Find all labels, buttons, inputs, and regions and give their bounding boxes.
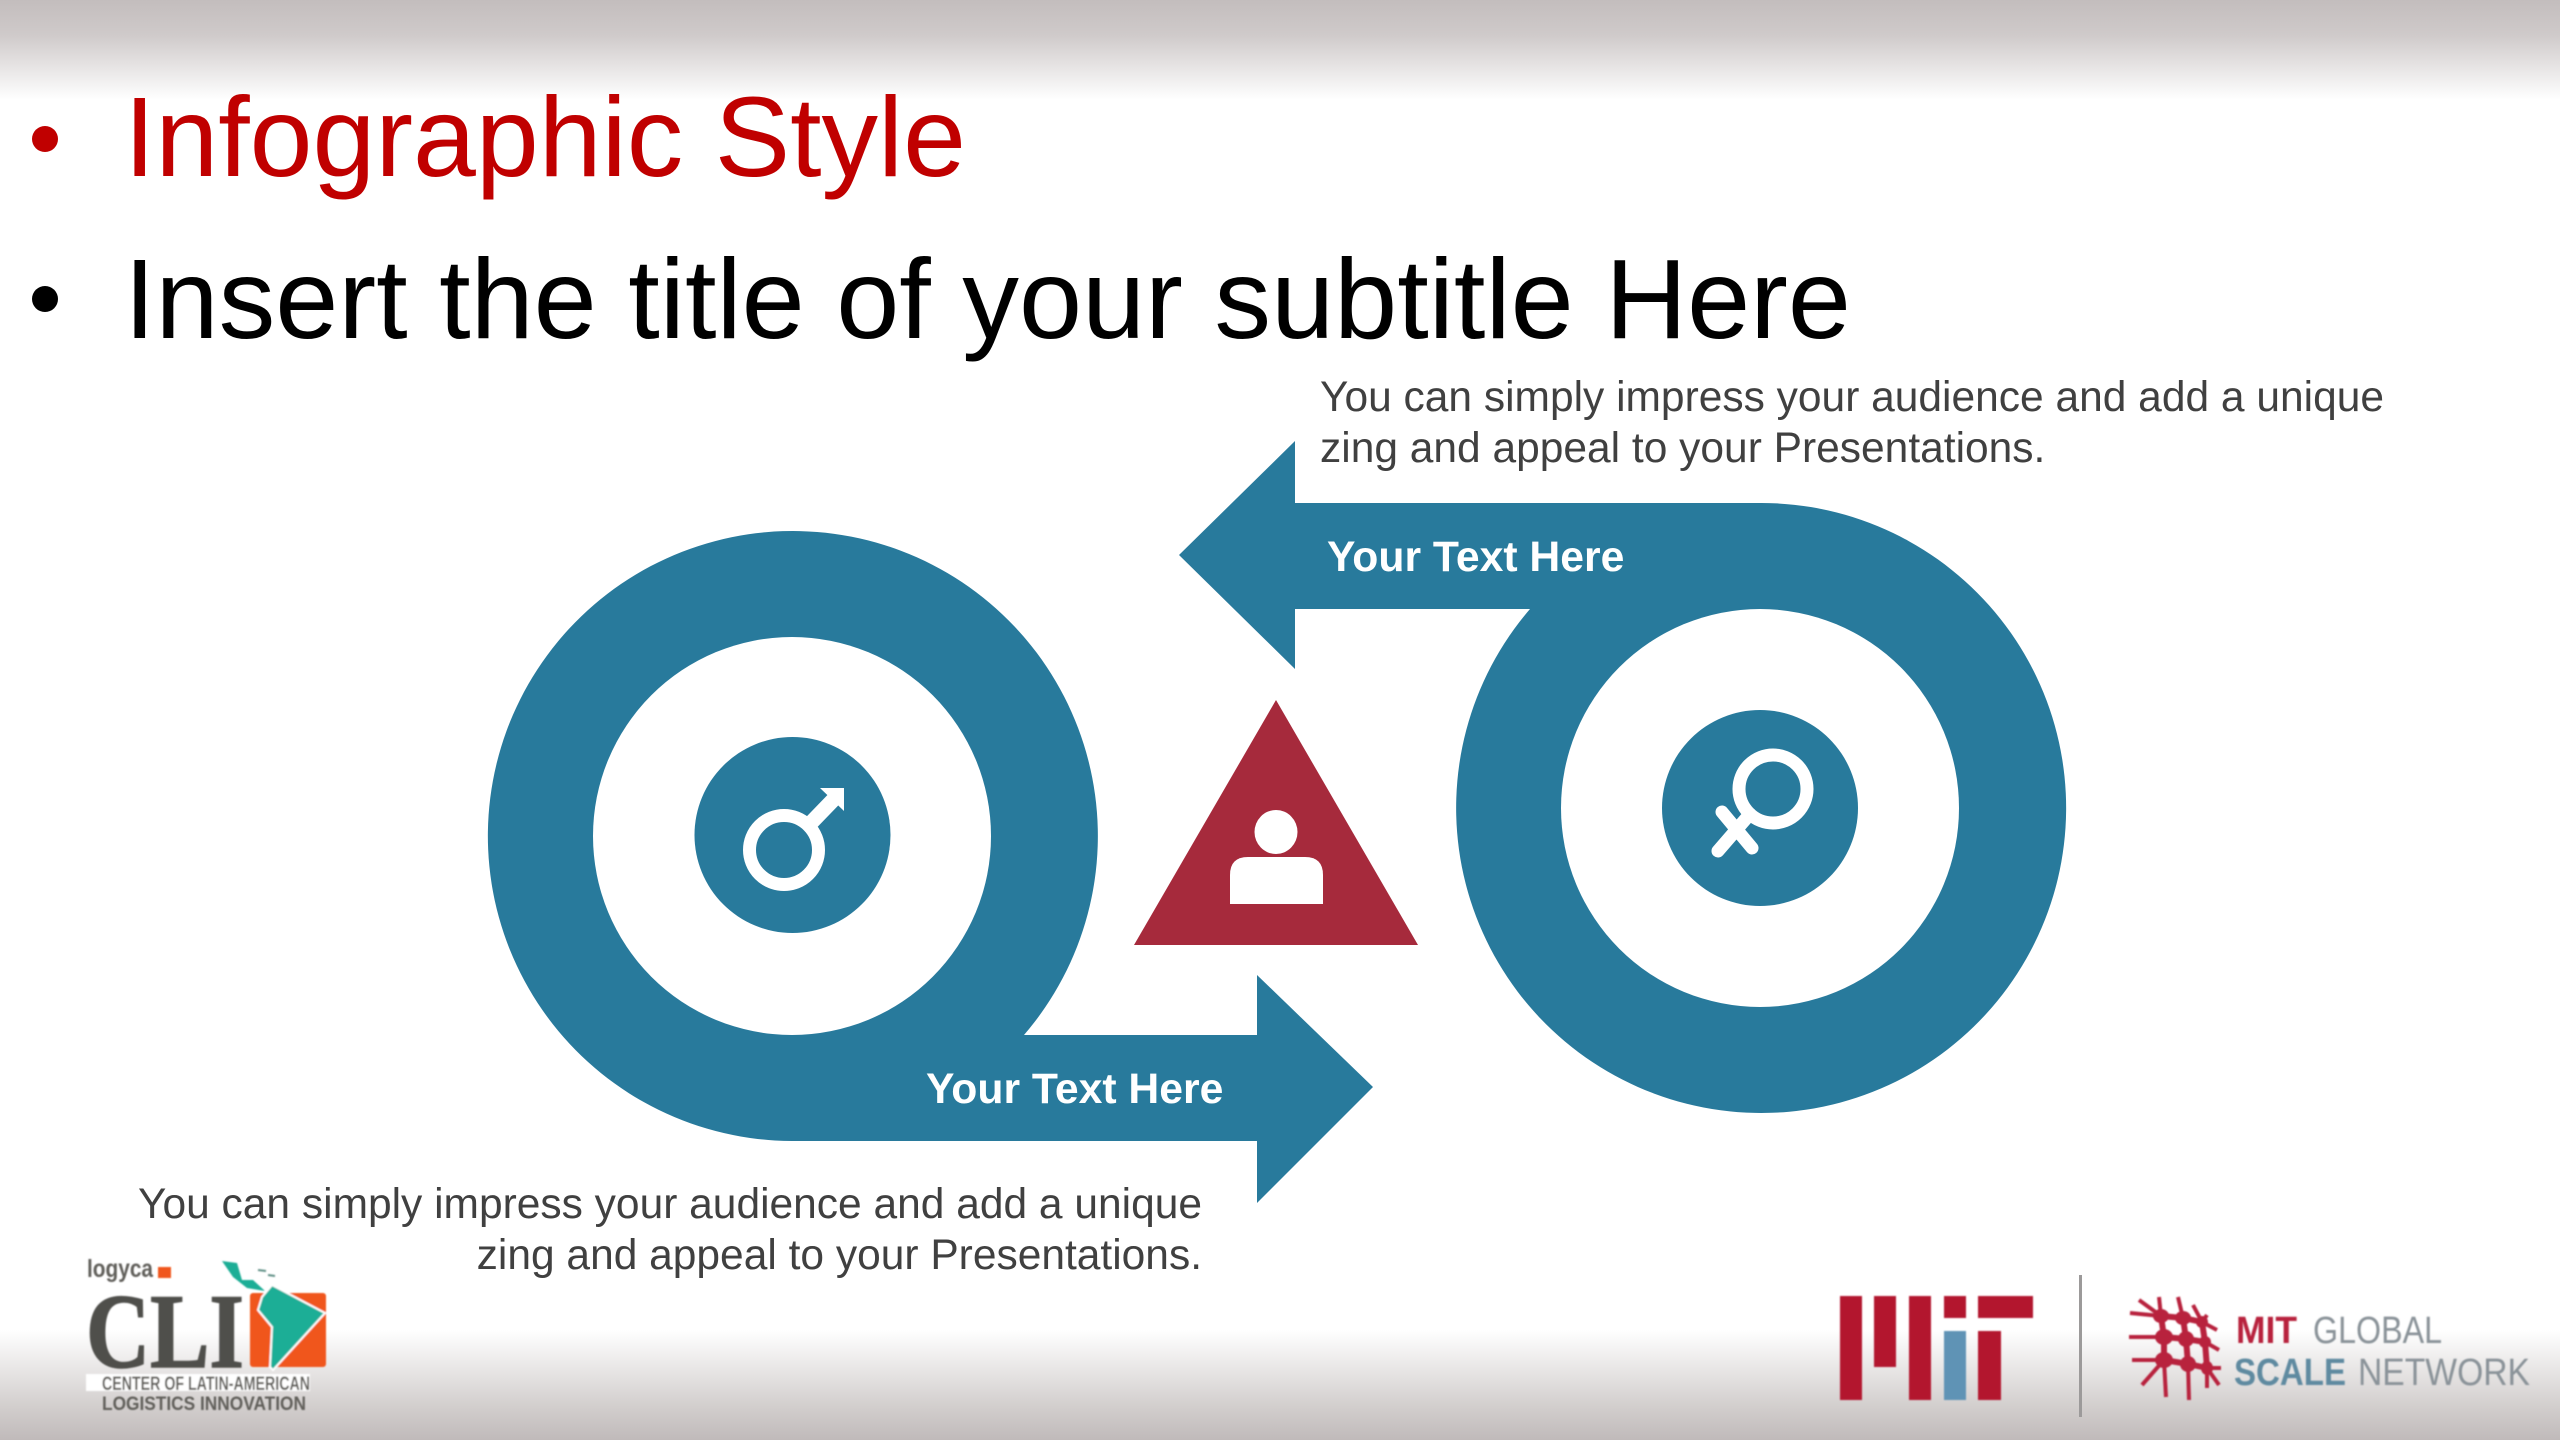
icon: female symbol	[1662, 710, 1858, 906]
arrow ring: male	[488, 531, 1373, 1203]
logo: CLI: logyca	[87, 1255, 154, 1283]
logo: MIT Global Scale Network: SCALE	[2234, 1352, 2346, 1394]
logo: MIT Global Scale Network: GLOBAL	[2313, 1310, 2442, 1352]
logo: MIT	[1840, 1296, 2033, 1400]
logo: CLI: CLI	[86, 1273, 244, 1390]
icon: male symbol	[694, 737, 890, 933]
icon: red triangle with person	[1134, 700, 1418, 945]
label: right arrow: Your Text Here	[1327, 533, 1624, 581]
divider	[2079, 1275, 2082, 1417]
panel: female ring with left arrow	[1179, 441, 2066, 1113]
label: left arrow: Your Text Here	[926, 1065, 1223, 1113]
logo: MIT Global Scale Network	[2129, 1297, 2530, 1400]
text block: bottom left description: You can simply impress your audience and add a unique	[138, 1181, 1202, 1228]
text block: top right description: zing and appeal to your Presentations.	[1320, 425, 2045, 472]
logo: MIT Global Scale Network: MIT	[2236, 1310, 2297, 1352]
logo: CLI: CENTER OF LATIN-AMERICAN	[102, 1374, 310, 1395]
arrow ring: female	[1179, 441, 2066, 1113]
text block: top right description: You can simply impress your audience and add a unique	[1320, 374, 2384, 421]
title: Infographic Style	[124, 74, 966, 200]
text block: bottom left description: zing and appeal to your Presentations.	[477, 1232, 1202, 1279]
text block: bottom left description	[138, 1181, 1202, 1279]
logo: CLI	[86, 1255, 326, 1415]
logo: CLI: LOGISTICS INNOVATION	[102, 1394, 306, 1415]
icon: network	[2129, 1297, 2221, 1400]
logo: MIT Global Scale Network: NETWORK	[2358, 1352, 2530, 1394]
panel: male ring with right arrow	[488, 531, 1373, 1203]
text block: top right description	[1320, 374, 2384, 472]
subtitle: Insert the title of your subtitle Here	[124, 236, 1851, 363]
